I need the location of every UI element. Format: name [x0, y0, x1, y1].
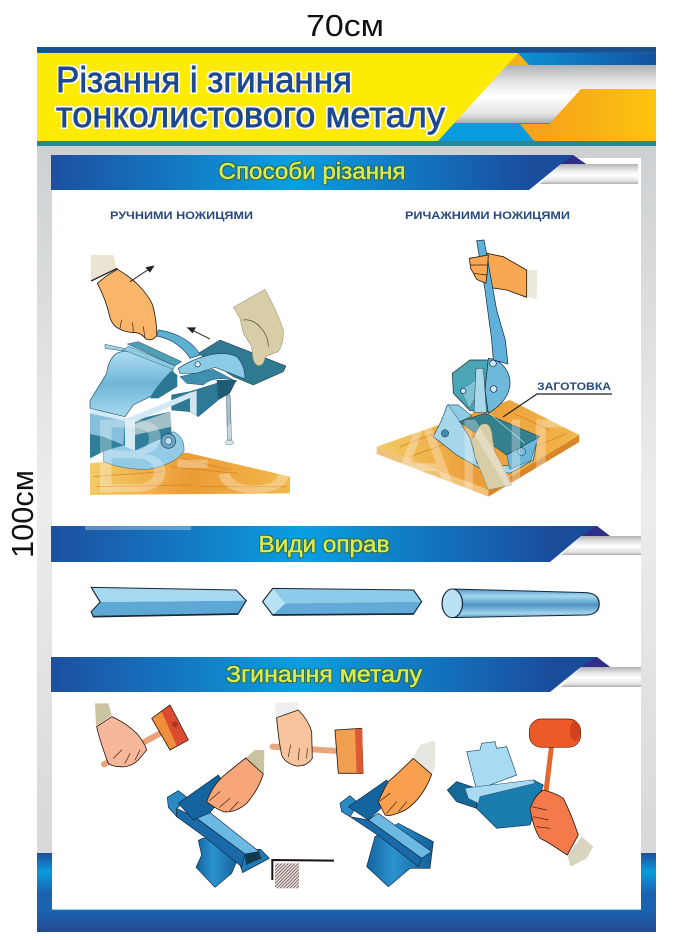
watermark: B-ST — [90, 398, 370, 515]
section header: metal bending — [51, 657, 641, 692]
mandrel: angle — [91, 587, 246, 617]
diagram: bent sheet section — [272, 860, 334, 888]
section header: metal bending: Згинання металу — [226, 661, 423, 687]
label: hand shears: РУЧНИМИ НОЖИЦЯМИ — [110, 210, 253, 222]
section header: cutting methods — [51, 155, 638, 190]
dimension label: height: 100см — [5, 470, 40, 558]
section header: mandrel types — [51, 526, 641, 562]
shears on wooden board — [377, 358, 579, 497]
watermark — [85, 398, 600, 530]
illustration: hand with mallet, horizontal — [273, 702, 363, 773]
lever and hand — [469, 240, 537, 364]
panel: white content area — [52, 158, 641, 909]
illustration: cutting with hand shears in a vise — [90, 255, 290, 495]
vise, shears and workbench — [90, 330, 290, 495]
hands and arrows — [91, 255, 283, 366]
section header: cutting methods: Способи різання — [218, 158, 406, 184]
illustration: cutting with lever shears — [377, 240, 579, 497]
mandrel: square — [263, 588, 422, 615]
header banner — [37, 47, 656, 146]
title: тонколистового металу — [56, 94, 445, 135]
illustration: bending in vise, second step — [340, 740, 435, 887]
poster background frame — [37, 146, 656, 853]
illustration: bending in vise, first step — [167, 750, 269, 887]
mandrel: round — [442, 589, 599, 618]
section header: mandrel types: Види оправ — [258, 531, 390, 557]
label: lever shears: РИЧАЖНИМИ НОЖИЦЯМИ — [405, 210, 570, 222]
callout: workpiece — [503, 381, 612, 417]
illustration: hand with mallet, angled — [95, 703, 188, 767]
callout: workpiece: ЗАГОТОВКА — [537, 381, 611, 393]
bottom blue frame — [37, 853, 656, 932]
title: Різання і згинання — [56, 59, 352, 100]
dimension label: width: 70см — [306, 8, 384, 43]
illustration: bending with mallet in vise — [447, 719, 593, 867]
watermark: AND — [390, 398, 600, 515]
